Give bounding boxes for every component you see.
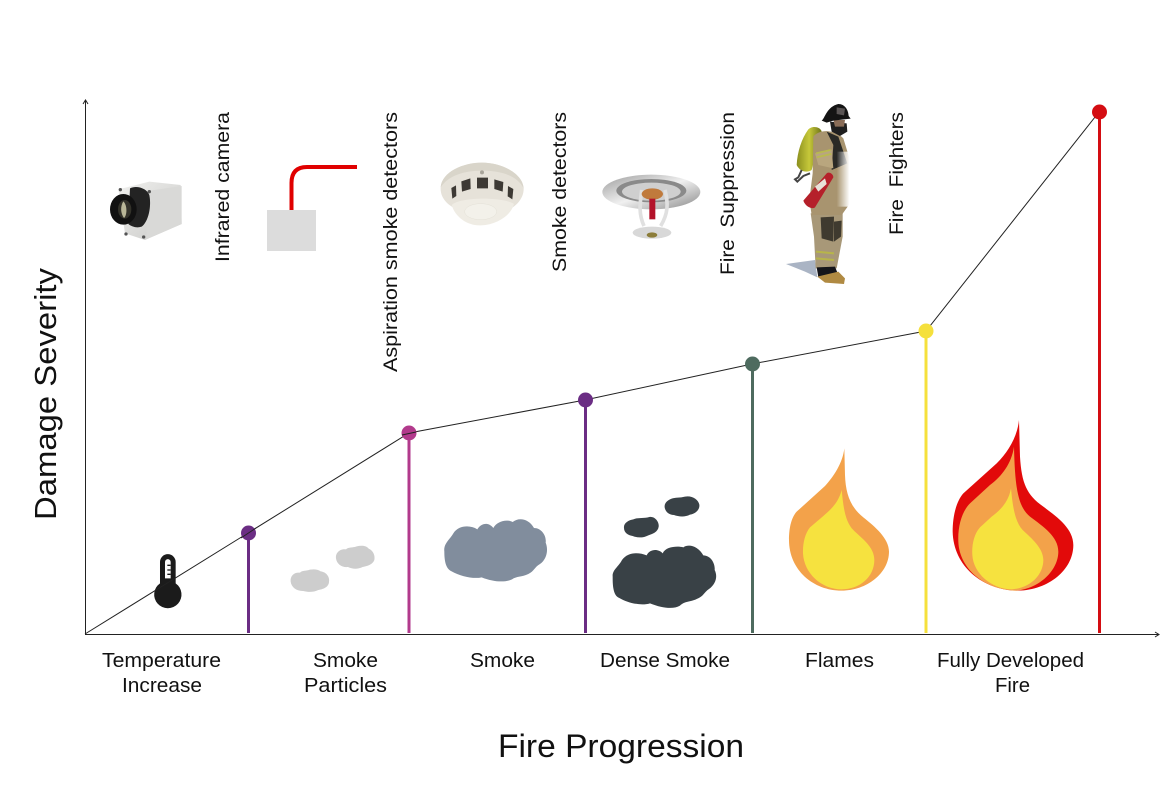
label: smoke detectors: Smoke detectors: [549, 112, 571, 272]
label: fire suppression: Fire Suppression: [717, 112, 739, 275]
marker: dense smoke: [745, 356, 760, 633]
icon: flame: [789, 448, 889, 591]
air tank: [797, 127, 822, 172]
label: fully developed fire: Fully Developed: [937, 649, 1084, 672]
head and helmet: [830, 122, 847, 136]
label: fire fighters: Fire Fighters: [886, 112, 908, 235]
x axis category labels: [102, 649, 1084, 697]
severity line: [85, 112, 1099, 634]
marker: fully developed fire: [1092, 104, 1107, 633]
label: fully developed fire: Fire: [995, 674, 1030, 697]
axes: [83, 100, 1159, 637]
marker: smoke: [578, 392, 593, 633]
floor shadow: [786, 260, 817, 277]
label: flames: Flames: [805, 649, 874, 672]
x axis title: Fire Progression: [498, 728, 744, 764]
label: smoke particles: [304, 649, 387, 697]
label: smoke particles: Smoke: [313, 649, 378, 672]
label: temperature increase: [102, 649, 221, 697]
label: fully developed fire: [937, 649, 1084, 697]
icon: infrared camera: [110, 182, 182, 240]
label: infrared camera: Infrared camera: [212, 112, 234, 262]
extinguisher: [803, 173, 833, 208]
icon: thermometer: [154, 554, 181, 608]
label: temperature increase: Increase: [122, 674, 202, 697]
label: temperature increase: Temperature: [102, 649, 221, 672]
y axis title: Damage Severity: [28, 267, 63, 520]
label: smoke: Smoke: [470, 649, 535, 672]
boots: [817, 267, 838, 277]
marker: temperature increase: [241, 526, 256, 633]
marker: flames: [918, 324, 934, 633]
icon: large flame: [953, 420, 1073, 591]
icon: dense smoke clouds: [613, 496, 716, 608]
torso: [809, 131, 850, 215]
icon: fire fighter: [786, 104, 873, 284]
icon: smoke cloud: [444, 519, 547, 581]
label: dense smoke: Dense Smoke: [600, 649, 730, 672]
label: aspiration smoke detectors: Aspiration smoke detectors: [380, 112, 402, 372]
marker: smoke particles: [402, 426, 416, 633]
icon: smoke detector: [441, 163, 524, 225]
white fade overlay: [837, 152, 873, 207]
icon: aspiration smoke detector: [267, 167, 357, 251]
icon: fire sprinkler: [602, 175, 700, 239]
label: smoke particles: Particles: [304, 674, 387, 697]
legs: [811, 210, 843, 268]
tank valve: [795, 170, 810, 182]
icon: smoke particles clouds: [291, 546, 375, 592]
